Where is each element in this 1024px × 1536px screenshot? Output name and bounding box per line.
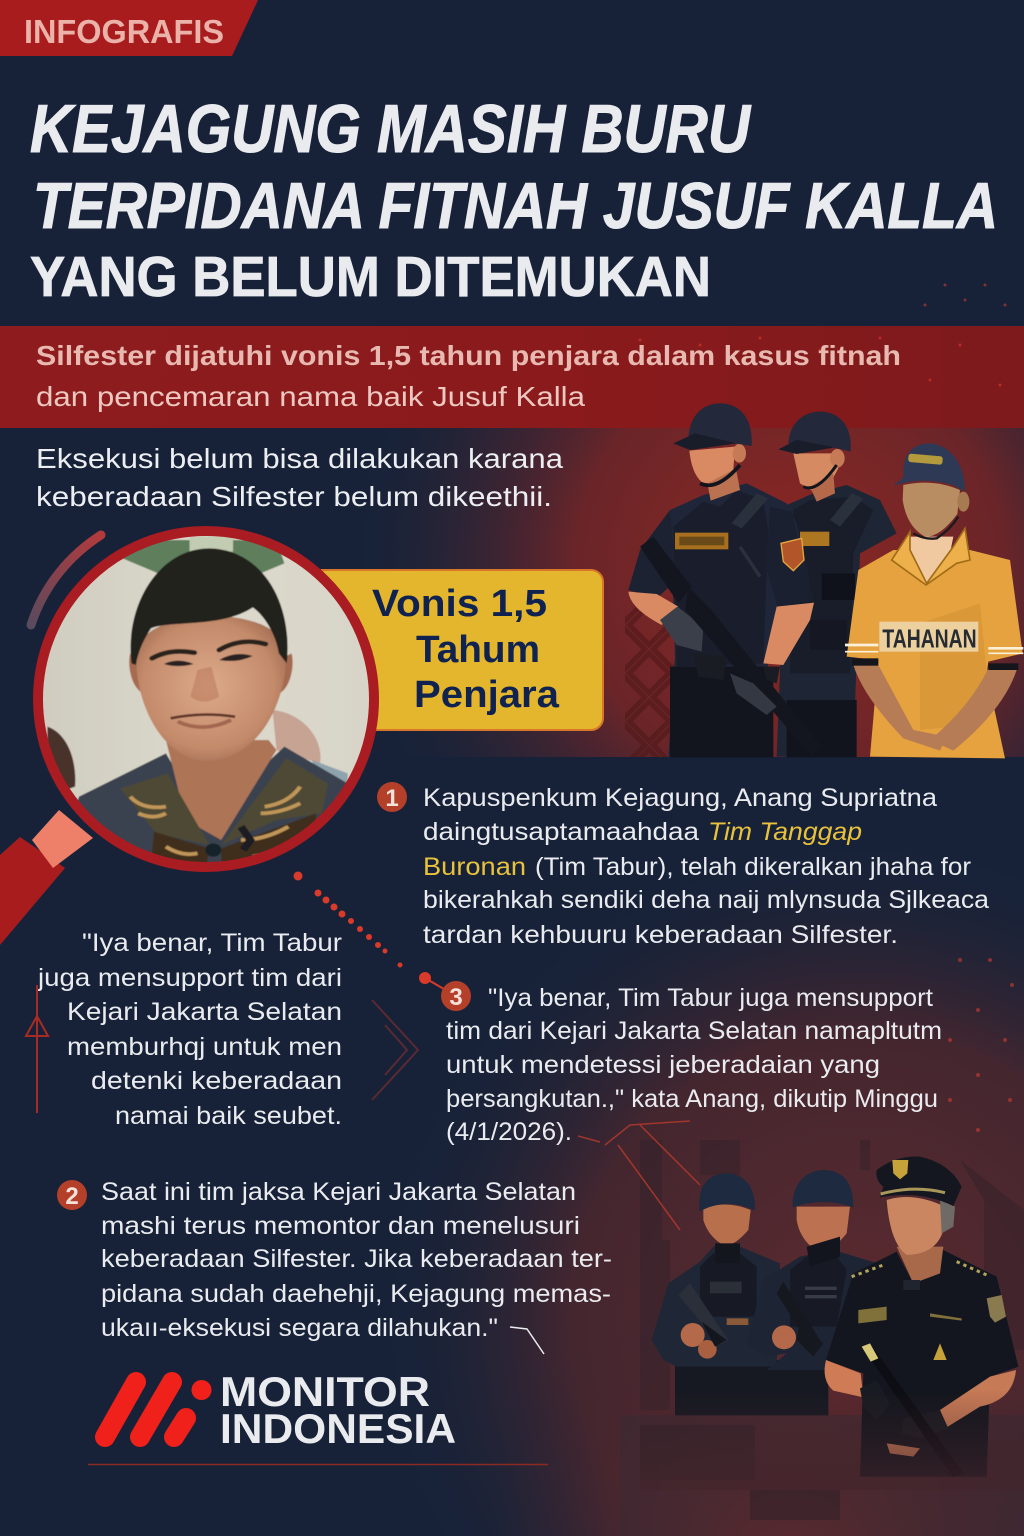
step 2 text: keberadaan Silfester. Jika keberadaan ter-: [101, 1245, 612, 1273]
step 2 text: pidana sudah daehehji, Kejagung memas-: [101, 1280, 611, 1308]
red band: summary: [0, 326, 1024, 428]
intro text: [36, 443, 563, 512]
left quote: memburhqj untuk men: [67, 1033, 342, 1061]
logo: monitor indonesia: MONITOR: [220, 1368, 430, 1415]
intro text: keberadaan Silfester belum dikeethii.: [36, 481, 552, 512]
step 1 text: daingtusaptamaahdaa: [423, 818, 699, 846]
number badge 2: 2: [65, 1183, 79, 1210]
label: tahanan: TAHANAN: [882, 623, 977, 653]
step 1 text: Tim Tanggap: [708, 818, 862, 846]
officer middle: [747, 1170, 883, 1370]
magnifier ring: [38, 531, 374, 867]
left quote: detenki keberadaan: [91, 1067, 342, 1095]
magnifier arc accent: [31, 535, 101, 625]
step 3 text: (4/1/2026).: [446, 1118, 572, 1146]
icon: tower ornament: [26, 985, 48, 1113]
step 2 text: Saat ini tim jaksa Kejari Jakarta Selatan: [101, 1178, 576, 1206]
step 2 text: ukaıı-eksekusi segara dilahukan.": [101, 1314, 498, 1342]
step 1 text: Buronan: [423, 853, 526, 881]
red tag: infografis: INFOGRAFIS: [24, 13, 224, 50]
yellow sentence box: [322, 570, 603, 730]
number badge 2: [57, 1180, 87, 1210]
step 3 text: þersangkutan.," kata Anang, dikutip Minggu: [446, 1085, 938, 1113]
red band: summary: Silfester dijatuhi vonis 1,5 tahun penjara dalam kasus fitnah: [36, 340, 901, 371]
footer rule: [88, 1464, 548, 1466]
step 1 text: (Tim Tabur), telah dikeralkan jhaha for: [535, 853, 971, 881]
yellow sentence box: Tahum: [416, 629, 540, 671]
officer right: [825, 1156, 1018, 1477]
yellow sentence box: Vonis 1,5: [372, 583, 547, 625]
guards and prisoner illustration: [628, 403, 1023, 758]
intro text: Eksekusi belum bisa dilakukan karana: [36, 443, 563, 474]
left quote: juga mensupport tim dari: [37, 964, 342, 992]
step 1 text: Kapuspenkum Kejagung, Anang Supriatna: [423, 784, 937, 812]
step 1 text: [377, 782, 989, 949]
number badge 3: 3: [449, 984, 463, 1011]
logo: monitor indonesia: INDONESIA: [220, 1405, 456, 1452]
number badge 3: [441, 981, 471, 1011]
step 2 text: mashi terus memontor dan menelusuri: [101, 1212, 580, 1240]
ground fade: [640, 1390, 1024, 1490]
step 2 text: [57, 1178, 612, 1354]
guard two: [777, 412, 897, 757]
left quote: [37, 929, 342, 1130]
left quote: "Iya benar, Tim Tabur: [82, 929, 342, 957]
logo mark: [105, 1382, 186, 1437]
red line ornament: [578, 1121, 700, 1230]
magnifier portrait: [0, 527, 383, 945]
left quote: Kejari Jakarta Selatan: [67, 998, 342, 1026]
step 3 text: [441, 981, 942, 1146]
title: KEJAGUNG MASIH BURU: [30, 91, 752, 167]
prisoner: [845, 443, 1023, 758]
number badge 1: [377, 782, 407, 812]
magnifier handle: [0, 810, 93, 945]
number badge 1: 1: [385, 785, 399, 812]
portrait photo: [43, 536, 369, 862]
title: YANG BELUM DITEMUKAN: [30, 245, 711, 309]
logo: monitor indonesia: [105, 1368, 456, 1452]
chevron ornament: [372, 1000, 418, 1100]
left quote: namai baik seubet.: [115, 1102, 342, 1130]
officer left: [652, 1173, 828, 1415]
guard one: [628, 403, 822, 757]
step 3 text: untuk mendetessi jeberadaian yang: [446, 1051, 880, 1079]
title: [30, 91, 998, 309]
dotted connector: [294, 872, 449, 992]
red tag: infografis: [0, 0, 258, 56]
yellow sentence box: Penjara: [414, 674, 560, 716]
red band: summary: dan pencemaran nama baik Jusuf Kalla: [36, 381, 585, 412]
step 3 text: tim dari Kejari Jakarta Selatan namapltutm: [446, 1017, 942, 1045]
step 1 text: tardan kehbuuru keberadaan Silfester.: [423, 921, 898, 949]
step 3 text: "Iya benar, Tim Tabur juga mensupport: [488, 984, 933, 1012]
officers illustration: [640, 1156, 1024, 1490]
step 1 text: bikerahkah sendiki deha naij mlynsuda Sjlkeaca: [423, 886, 989, 914]
